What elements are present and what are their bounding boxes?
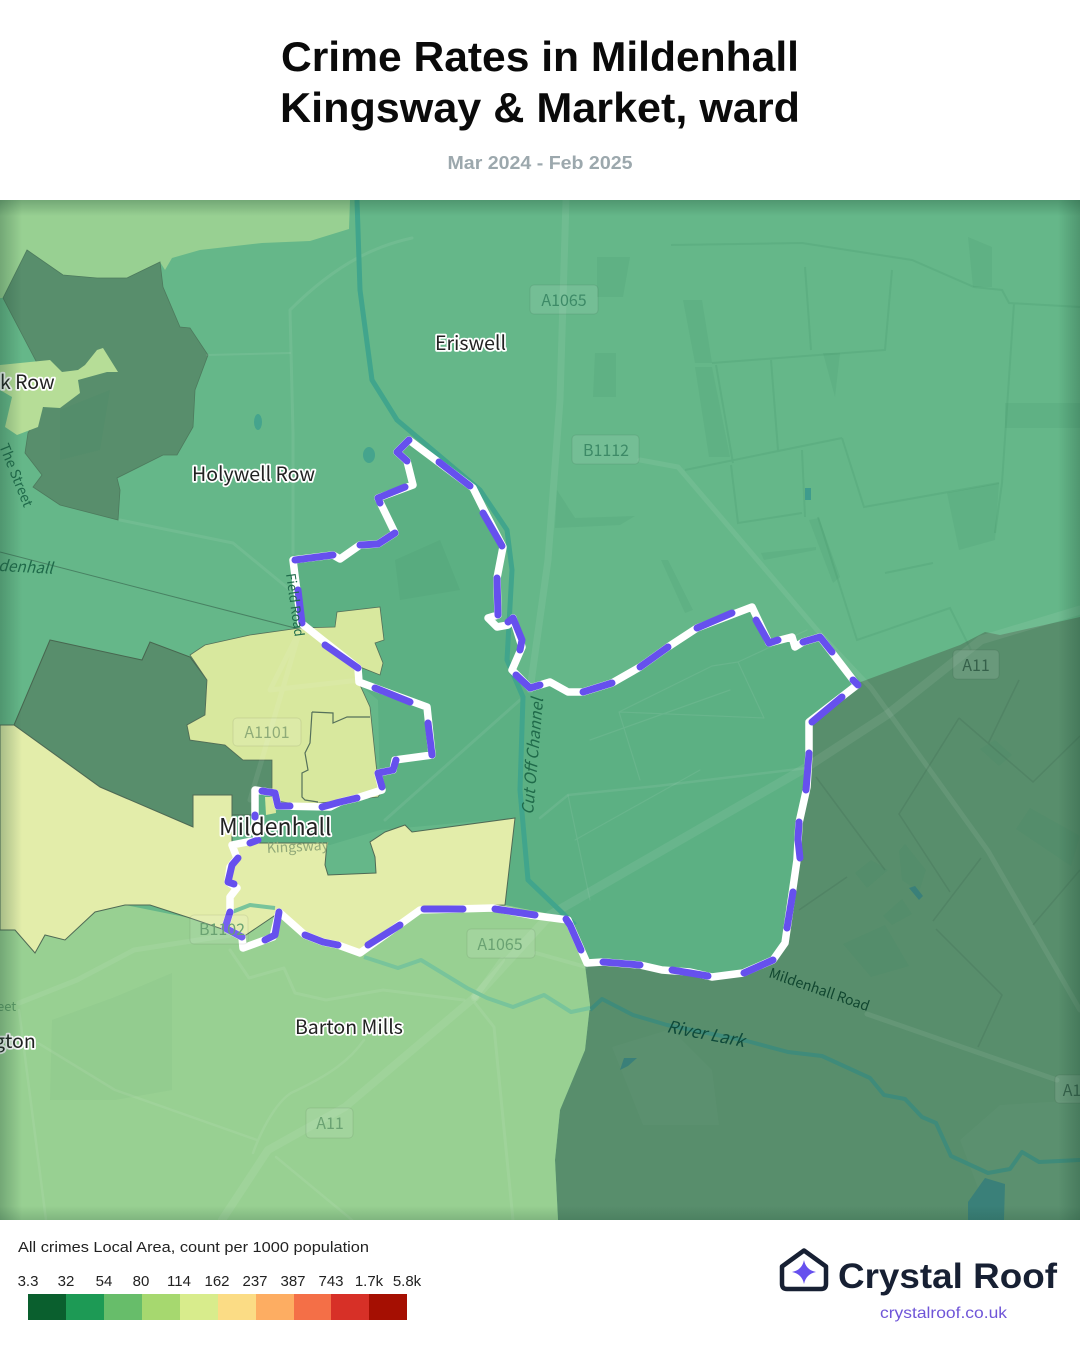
water: lakes (254, 414, 1005, 1220)
railway line (0, 552, 295, 628)
legend tick labels: 54 (96, 1273, 112, 1290)
area: north-west dark patch (3, 250, 208, 520)
legend tick labels: 1.7k (355, 1273, 384, 1290)
area: south light-green zone (0, 905, 590, 1220)
street and water labels: River Lark (665, 1012, 750, 1052)
south-east field boundaries (799, 680, 1080, 1047)
area: west dark patch (14, 640, 272, 827)
legend tick labels: 162 (204, 1273, 230, 1290)
area: south Mildenhall yellow zone (0, 725, 515, 953)
legend tick labels: 114 (167, 1273, 191, 1290)
subtitle: date range: Mar 2024 - Feb 2025 (448, 153, 632, 173)
area: ward fill (255, 440, 857, 977)
place labels (0, 327, 506, 1054)
legend tick labels: 237 (242, 1273, 268, 1290)
area: north-west lower crime zone (0, 200, 350, 298)
legend tick labels: 32 (58, 1273, 74, 1290)
legend tick labels: 387 (280, 1273, 306, 1290)
title (280, 33, 800, 131)
map (0, 200, 1080, 1220)
street and water labels: Field Road (282, 572, 310, 638)
map vignette (0, 200, 1080, 1220)
place labels: Holywell Row (192, 458, 315, 487)
road badges: A1065 (541, 287, 587, 311)
place labels: k Row (0, 366, 55, 395)
road badges: A11 (316, 1110, 344, 1134)
place labels: Eriswell (435, 327, 506, 356)
legend title: All crimes Local Area, count per 1000 population (18, 1239, 369, 1256)
area: south-east high zone (555, 617, 1080, 1220)
area: far west dark patch (0, 843, 25, 890)
water: Cut Off Channel (357, 200, 575, 925)
website: crystalroof.co.uk (880, 1305, 1008, 1322)
road badges: B1102 (199, 916, 245, 940)
street and water labels: Cut Off Channel (514, 694, 548, 815)
title: Kingsway & Market, ward (280, 84, 800, 131)
area: small yellow sliver (265, 797, 276, 815)
place labels: Mildenhall (219, 808, 332, 842)
area: north-west light patch (0, 348, 118, 435)
lighter land blobs in south-east (612, 1029, 1080, 1220)
legend colour scale (28, 1294, 407, 1320)
street and water labels: Mildenhall Road (766, 963, 872, 1016)
ward boundary: white line (225, 440, 857, 977)
roads (118, 202, 1080, 1082)
road badges (190, 285, 1080, 1138)
legend tick labels: 5.8k (393, 1273, 422, 1290)
area: north Mildenhall yellow zone (187, 607, 384, 805)
legend (18, 1239, 422, 1320)
legend tick labels: 80 (133, 1273, 149, 1290)
place labels: Barton Mills (295, 1011, 403, 1040)
title: Crime Rates in Mildenhall (281, 33, 799, 80)
place labels: Kingsway (266, 835, 330, 858)
water: River Lark (590, 999, 1080, 1173)
road badges: A1101 (244, 719, 290, 743)
road badges: A1065 (477, 931, 523, 955)
water: western river (232, 905, 590, 1012)
legend tick labels (18, 1273, 422, 1290)
logo: Crystal Roof (782, 1250, 1057, 1322)
wordmark: Crystal Roof (838, 1257, 1057, 1296)
dark field blocks (50, 237, 1080, 1100)
road badges: B1112 (583, 437, 629, 461)
icon: house with star (782, 1250, 826, 1289)
legend tick labels: 743 (318, 1273, 344, 1290)
street and water labels (0, 440, 872, 1052)
map base area (0, 200, 1080, 1220)
inner outlined neighbourhood (302, 712, 370, 802)
ward boundary: purple dashes (225, 440, 858, 976)
legend tick labels: 3.3 (18, 1273, 38, 1290)
field boundaries (671, 243, 1080, 650)
road badges: A11 (962, 652, 990, 676)
